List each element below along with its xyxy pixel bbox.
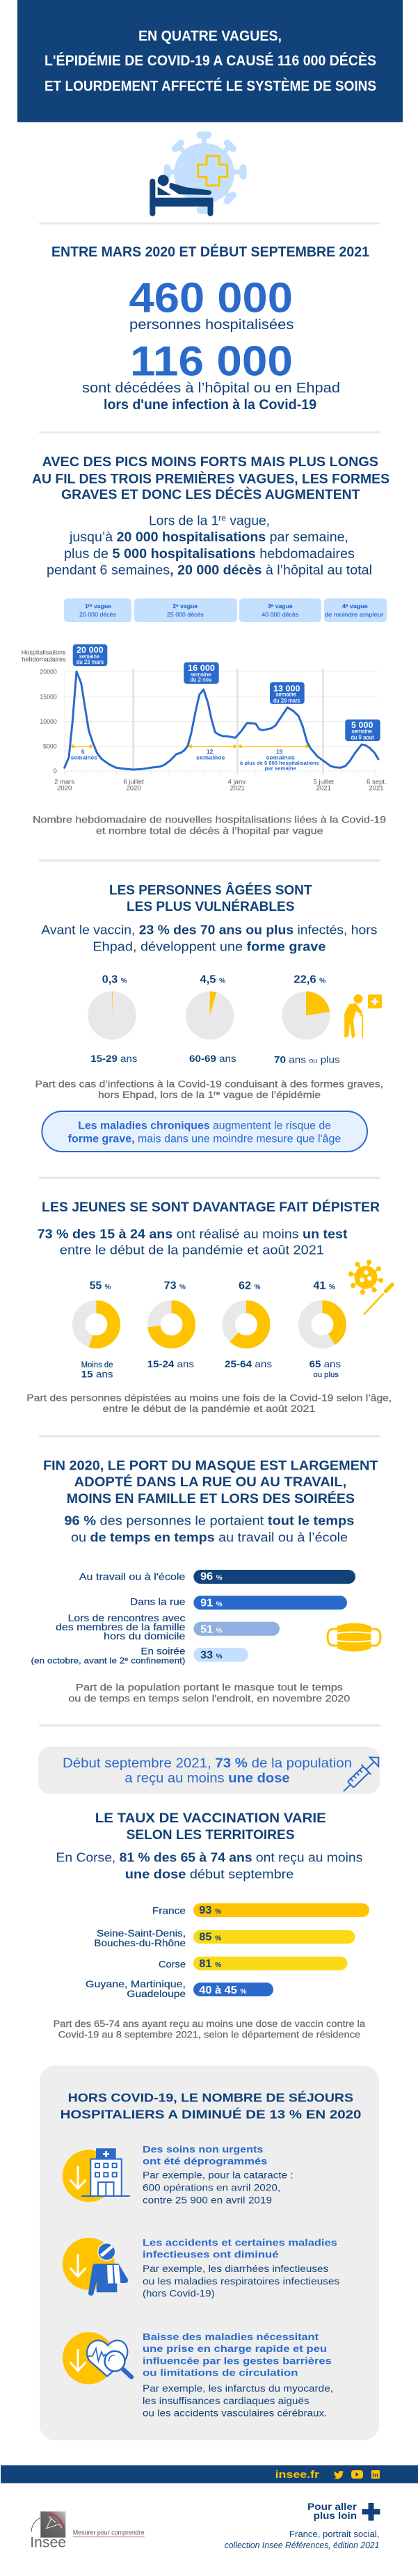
callout: 5 000: semaine <box>352 728 372 735</box>
icon: heart with magnifier and down arrow <box>63 2332 131 2384</box>
legend: wave boxes: re <box>88 604 93 608</box>
panel: older people <box>35 883 383 1152</box>
chart: weekly hospitalisations line: 15000 <box>40 693 57 701</box>
text: older people summary: Avant le vaccin, 23 % des 70 ans ou plus infectés, hors <box>41 922 377 937</box>
callout: 16 000: semaine <box>191 671 211 678</box>
text: accidents and infectious diseases: (hors Covid-19) <box>143 2289 215 2299</box>
chart: vaccination bars: 81 % <box>199 1958 221 1970</box>
labels: weeks above 5000: semaines <box>196 754 225 761</box>
chart: pie 15-29 ans: 0,3 % <box>102 973 127 985</box>
divider <box>39 431 380 434</box>
callout: 13 000: du 29 mars <box>273 697 300 703</box>
chart: vaccination bars: Seine-Saint-Denis, <box>97 1927 186 1939</box>
icon: linkedin <box>371 2470 380 2479</box>
text: deferred care: Par exemple, pour la cataracte : <box>143 2170 294 2180</box>
callout: 20 000: 20 000 <box>77 645 104 655</box>
text: masks summary: ou de temps en temps au travail ou à l’école <box>71 1529 348 1544</box>
chart: mask bars: 96 % <box>200 1571 223 1583</box>
text: accidents and infectious diseases: Les accidents et certaines maladies <box>143 2237 337 2248</box>
number: hospitalised: 460 000 <box>129 275 293 321</box>
text: accidents and infectious diseases: Par exemple, les diarrhées infectieuses <box>143 2264 328 2274</box>
title <box>45 28 376 94</box>
chart: donut 15-24 ans <box>147 1280 194 1369</box>
chart: pie 60-69 ans: 4,5 % <box>200 973 225 985</box>
text: urgent illnesses: influencée par les gestes barrières <box>143 2355 332 2366</box>
callout: 5 000 <box>345 719 380 741</box>
chart: pie 60-69 ans: 60-69 ans <box>189 1053 236 1064</box>
heading: pour aller plus loin <box>307 2501 357 2521</box>
text: vaccination <box>63 1756 352 1786</box>
labels: weeks above 5000: 6 <box>81 748 85 755</box>
chart: donut 15-24 ans: 73 % <box>164 1280 186 1292</box>
legend: wave boxes <box>64 598 387 622</box>
chart: vaccination bars: Guyane, Martinique, <box>86 1978 186 1989</box>
text: first wave summary: re <box>218 513 226 523</box>
text: urgent illnesses: Baisse des maladies nécessitant <box>143 2332 319 2342</box>
text: hospitalised label: personnes hospitalisées <box>129 317 294 333</box>
icon: twitter <box>334 2471 344 2479</box>
chart: donut 65 ans ou plus <box>305 1280 341 1379</box>
text: first wave summary: pendant 6 semaines , 20 000 décès à l’hôpital au total <box>47 564 372 578</box>
yellow ranges above 5000 <box>71 745 309 748</box>
caption: testing <box>26 1392 392 1414</box>
heading: waves: GRAVES ET DONC LES DÉCÈS AUGMENTENT <box>61 487 360 502</box>
labels: weeks above 5000: à plus de 5 000 hospitalisations <box>240 760 319 766</box>
legend: wave boxes: 4 <box>342 603 346 610</box>
text: accidents and infectious diseases: ou les maladies respiratoires infectieuses <box>143 2276 340 2287</box>
callout: 5 000: 5 000 <box>351 720 373 730</box>
icon: hospital with down arrow <box>63 2148 130 2202</box>
chart: mask bars: En soirée <box>140 1645 186 1656</box>
chart: mask bars <box>31 1570 355 1665</box>
text: accidents and infectious diseases: infectieuses ont diminué <box>143 2249 279 2259</box>
chart: donut 15-24 ans: 15-24 ans <box>147 1358 194 1369</box>
text: reference <box>225 2529 379 2550</box>
legend: wave boxes: 2 <box>172 603 176 610</box>
text: accidents and infectious diseases <box>143 2237 340 2299</box>
icon: elderly person with cross <box>344 994 382 1038</box>
callout: 16 000: du 2 nov. <box>191 676 213 683</box>
heading: hospital stays <box>61 2090 362 2122</box>
panel: header banner <box>17 0 403 122</box>
caption: waves chart: Nombre hebdomadaire de nouvelles hospitalisations liées à la Covid-19 <box>33 814 386 825</box>
text: territories summary: une dose début septembre <box>125 1866 294 1881</box>
chart: weekly hospitalisations line: hebdomadaires <box>22 655 66 663</box>
title: EN QUATRE VAGUES, <box>138 28 282 45</box>
caption: testing: entre le début de la pandémie et août 2021 <box>103 1404 315 1414</box>
text: first wave summary: vague, <box>226 514 270 528</box>
panel: non-Covid hospital stays <box>40 2065 379 2440</box>
chart: weekly hospitalisations line: 6 juillet <box>123 779 144 786</box>
chart: vaccination bars: Guadeloupe <box>127 1988 186 1999</box>
icon: youtube <box>351 2470 363 2479</box>
callout: 20 000: du 23 mars <box>77 658 104 665</box>
heading: waves <box>32 455 389 502</box>
caption: older people: Part des cas d’infections à la Covid-19 conduisant à des formes graves, <box>35 1079 383 1089</box>
chart: weekly hospitalisations line: 2020 <box>126 785 141 793</box>
chart: weekly hospitalisations line: 4 janv. <box>228 779 247 786</box>
heading: pour aller plus loin: Pour aller <box>307 2501 357 2512</box>
chart: weekly hospitalisations line: Hospitalisations <box>22 649 66 657</box>
text: testing summary: 73 % des 15 à 24 ans ont réalisé au moins un test <box>38 1226 347 1241</box>
labels: weeks above 5000: semaines <box>266 754 295 761</box>
text: masks summary: 96 % des personnes le portaient tout le temps <box>64 1513 354 1527</box>
heading: waves: AU FIL DES TROIS PREMIÈRES VAGUES, LES FORMES <box>32 471 389 486</box>
chart: weekly hospitalisations line: 2 mars <box>54 779 74 786</box>
text: testing summary: entre le début de la pandémie et août 2021 <box>60 1242 324 1257</box>
panel: vaccination callout <box>38 1747 383 1796</box>
chart: donut moins de 15 ans <box>79 1280 114 1379</box>
text: deferred care: Des soins non urgents <box>143 2145 263 2154</box>
text: testing summary <box>38 1226 347 1257</box>
caption: masks <box>68 1682 350 1703</box>
legend: wave boxes: e <box>271 604 274 608</box>
heading: masks: FIN 2020, LE PORT DU MASQUE EST LARGEMENT <box>43 1458 378 1473</box>
logo: Insee: Insee <box>30 2534 66 2551</box>
chart: donut 25-64 ans <box>225 1280 272 1369</box>
callout: 13 000: 13 000 <box>273 683 300 693</box>
text: deferred care: 600 opérations en avril 2020, <box>143 2182 280 2193</box>
legend: wave boxes: de moindre ampleur <box>325 611 383 618</box>
chart: donut 65 ans ou plus: 65 ans <box>310 1358 341 1369</box>
legend: wave boxes: vague <box>93 603 111 610</box>
text: urgent illnesses <box>143 2332 333 2419</box>
labels: weeks above 5000: semaines <box>71 754 97 761</box>
chart: weekly hospitalisations line: 0 <box>54 768 57 775</box>
heading: masks <box>43 1458 378 1506</box>
chart: mask bars: confinement) <box>128 1655 185 1665</box>
callout: chronic diseases <box>42 1111 367 1152</box>
heading: testing: LES JEUNES SE SONT DAVANTAGE FAIT DÉPISTER <box>42 1200 380 1215</box>
labels: weeks above 5000: 12 <box>207 748 214 755</box>
text: territories summary: En Corse, 81 % des 65 à 74 ans ont reçu au moins <box>56 1850 362 1864</box>
chart: mask bars: 91 % <box>200 1597 223 1609</box>
panel: waves <box>22 455 389 836</box>
divider <box>39 1435 380 1438</box>
panel: mask wearing <box>31 1458 380 1703</box>
caption: territories: Part des 65-74 ans ayant reçu au moins une dose de vaccin contre la <box>54 2019 366 2029</box>
icon: linkedin: in <box>373 2472 378 2479</box>
text: first wave summary: plus de 5 000 hospitalisations hebdomadaires <box>64 547 355 562</box>
line: hospitalisations <box>65 671 378 770</box>
caption: older people: re <box>214 1090 220 1097</box>
text: deaths label: sont décédées à l’hôpital ou en Ehpad <box>82 381 340 396</box>
text: urgent illnesses: une prise en charge rapide et peu <box>143 2344 327 2354</box>
text: vaccination: Début septembre 2021, 73 % de la population <box>63 1756 352 1771</box>
panel: further reading <box>225 2501 380 2550</box>
legend: wave boxes: 20 000 décès <box>79 611 116 618</box>
chart: weekly hospitalisations line: 2021 <box>316 785 331 793</box>
text: first wave summary: jusqu’à 20 000 hospitalisations par semaine, <box>69 530 348 545</box>
caption: waves chart <box>33 814 386 836</box>
caption: older people: vague de l’épidémie <box>220 1090 321 1100</box>
chart: donut 65 ans ou plus: ou plus <box>313 1371 339 1379</box>
chart: mask bars: e <box>124 1656 129 1662</box>
caption: masks: ou de temps en temps selon l'endroit, en novembre 2020 <box>68 1693 350 1703</box>
chart: pie 70 ans ou plus: 70 ans ou plus <box>274 1054 340 1065</box>
caption: territories: Covid-19 au 8 septembre 2021, selon le département de résidence <box>58 2029 360 2040</box>
chart: vaccination bars <box>86 1903 369 1999</box>
chart: pie 15-29 ans: 15-29 ans <box>90 1053 137 1064</box>
title: ET LOURDEMENT AFFECTÉ LE SYSTÈME DE SOINS <box>45 77 376 94</box>
text: older people summary: Ehpad, développent une forme grave <box>93 939 325 954</box>
chart: vaccination bars: 93 % <box>199 1905 221 1916</box>
panel: vaccination by territory <box>54 1811 369 2040</box>
heading: hospital stays: HOSPITALIERS A DIMINUÉ DE 13 % EN 2020 <box>61 2107 362 2122</box>
chart: vaccination bars: 85 % <box>199 1932 221 1943</box>
text: deferred care: contre 25 900 en avril 2019 <box>143 2195 272 2205</box>
heading: masks: MOINS EN FAMILLE ET LORS DES SOIRÉES <box>67 1491 355 1506</box>
chart: mask bars: (en octobre, avant le 2 <box>31 1655 114 1665</box>
heading: older people: LES PERSONNES ÂGÉES SONT <box>109 883 312 898</box>
chart: weekly hospitalisations line: 10000 <box>40 718 57 726</box>
labels: weeks above 5000 <box>71 748 319 772</box>
text: deferred care <box>143 2145 294 2205</box>
chart: donut moins de 15 ans: 55 % <box>90 1280 111 1292</box>
footer bar <box>1 2465 418 2483</box>
chart: weekly hospitalisations line: 6 sept. <box>367 779 387 786</box>
legend: wave boxes: vague <box>179 603 198 610</box>
heading: masks: ADOPTÉ DANS LA RUE OU AU TRAVAIL, <box>74 1474 346 1490</box>
chart: weekly hospitalisations line: 5 juillet <box>314 779 334 786</box>
chart: vaccination bars: France <box>152 1905 186 1916</box>
chart: mask bars: des membres de la famille <box>56 1621 186 1632</box>
text: deferred care: ont été déprogrammés <box>143 2156 267 2167</box>
chart: weekly hospitalisations line: 2020 <box>57 785 72 793</box>
text: territories summary <box>56 1850 362 1881</box>
logo: Insee <box>30 2511 145 2551</box>
text: urgent illnesses: ou les accidents vasculaires cérébraux. <box>143 2408 327 2419</box>
caption: testing: Part des personnes dépistées au moins une fois de la Covid-19 selon l’âge, <box>26 1392 392 1403</box>
callout: 20 000 <box>73 644 107 666</box>
heading: territories <box>95 1811 326 1843</box>
chart: vaccination bars: 40 à 45 % <box>199 1985 247 1996</box>
legend: wave boxes: vague <box>348 603 368 610</box>
callout: 20 000: semaine <box>79 653 99 660</box>
chart: weekly hospitalisations line: 20000 <box>40 668 57 676</box>
text: urgent illnesses: Par exemple, les infarctus du myocarde, <box>143 2383 333 2394</box>
labels: weeks above 5000: 19 <box>276 748 283 755</box>
legend: wave boxes: e <box>346 604 348 608</box>
divider <box>39 859 380 861</box>
divider <box>39 1177 380 1179</box>
chart: pie 60-69 ans <box>186 973 236 1064</box>
chart: donut 25-64 ans: 62 % <box>239 1280 261 1292</box>
icon: yellow virus and swab <box>348 1259 392 1314</box>
chart: mask bars: Dans la rue <box>130 1596 186 1607</box>
legend: wave boxes: vague <box>273 603 293 610</box>
heading: pour aller plus loin: plus loin <box>314 2510 357 2521</box>
legend: wave boxes: 40 000 décès <box>262 611 298 618</box>
text: first wave summary <box>47 513 372 578</box>
divider <box>39 1724 380 1727</box>
icon: injured person with down arrow <box>63 2238 128 2296</box>
legend: wave boxes: e <box>176 604 179 608</box>
icon: plus <box>362 2503 380 2520</box>
chart: weekly hospitalisations line <box>22 644 387 793</box>
chart: weekly hospitalisations line: 2021 <box>369 785 384 793</box>
title: L'ÉPIDÉMIE DE COVID-19 A CAUSÉ 116 000 DÉCÈS <box>45 51 376 69</box>
chart: mask bars: 51 % <box>200 1623 223 1635</box>
chart: weekly hospitalisations line: 2021 <box>230 785 245 793</box>
heading: older people <box>109 883 312 914</box>
chart: pie 70 ans ou plus <box>274 973 340 1065</box>
callout: chronic diseases: Les maladies chroniques augmentent le risque de <box>78 1120 331 1131</box>
text: urgent illnesses: ou limitations de circulation <box>143 2367 298 2378</box>
heading: hospital stays: HORS COVID-19, LE NOMBRE DE SÉJOURS <box>68 2090 353 2105</box>
number: deaths: 116 000 <box>130 338 293 384</box>
divider <box>39 223 380 224</box>
legend: wave boxes: 3 <box>268 603 271 610</box>
panel: key figures <box>51 244 369 413</box>
text: deaths label <box>82 381 340 413</box>
chart: pie 15-29 ans <box>88 973 137 1064</box>
text: vaccination: a reçu au moins une dose <box>124 1771 290 1786</box>
chart: mask bars: hors du domicile <box>104 1630 186 1641</box>
callout: chronic diseases: forme grave, mais dans une moindre mesure que l'âge <box>68 1133 341 1145</box>
chart: pie 70 ans ou plus: 22,6 % <box>294 973 325 985</box>
caption: older people <box>35 1079 383 1100</box>
caption: masks: Part de la population portant le masque tout le temps <box>76 1682 343 1692</box>
text: urgent illnesses: les insuffisances cardiaques aiguës <box>143 2396 310 2406</box>
text: older people summary <box>41 922 377 954</box>
legend: wave boxes: 1 <box>85 603 88 610</box>
icon: mask <box>328 1623 380 1652</box>
icon: syringe <box>339 1752 383 1796</box>
callout: 16 000: 16 000 <box>188 663 215 673</box>
icon: virus with hospital bed <box>150 135 243 216</box>
logo: Insee: Mesurer pour comprendre <box>73 2529 145 2537</box>
chart: donut 25-64 ans: 25-64 ans <box>225 1358 272 1369</box>
text: masks summary <box>64 1513 354 1544</box>
labels: weeks above 5000: par semaine <box>265 765 296 772</box>
chart: vaccination bars: Bouches-du-Rhône <box>94 1937 186 1948</box>
chart: weekly hospitalisations line: 5000 <box>43 743 57 751</box>
chart: vaccination bars: Corse <box>159 1958 186 1969</box>
caption: older people: hors Ehpad, lors de la 1 <box>98 1090 198 1100</box>
chart: donut moins de 15 ans: Moins de <box>81 1361 113 1369</box>
heading: territories: LE TAUX DE VACCINATION VARIE <box>95 1811 326 1826</box>
heading: period: ENTRE MARS 2020 ET DÉBUT SEPTEMBRE 2021 <box>51 244 369 260</box>
caption: waves chart: et nombre total de décès à l’hopital par vague <box>96 825 323 836</box>
chart: mask bars: 33 % <box>200 1649 223 1661</box>
heading: older people: LES PLUS VULNÉRABLES <box>127 899 295 914</box>
caption: territories <box>54 2019 366 2040</box>
text: first wave summary: Lors de la 1 <box>149 514 218 528</box>
chart: mask bars: Au travail ou à l'école <box>79 1571 186 1582</box>
callout: 5 000: du 9 aout <box>351 733 374 740</box>
chart: mask bars: Lors de rencontres avec <box>68 1612 185 1623</box>
heading: waves: AVEC DES PICS MOINS FORTS MAIS PLUS LONGS <box>42 455 378 470</box>
callout: 13 000: semaine <box>275 690 296 697</box>
link: insee.fr: insee.fr <box>275 2470 319 2481</box>
text: reference: France, portrait social, <box>289 2529 379 2539</box>
legend: wave boxes: 25 000 décès <box>167 611 204 618</box>
chart: donut 65 ans ou plus: 41 % <box>313 1280 335 1292</box>
callout: 16 000 <box>184 662 219 684</box>
callout: 13 000 <box>270 682 305 704</box>
panel: testing among young people <box>26 1200 392 1414</box>
text: reference: collection Insee Références, édition 2021 <box>225 2540 379 2550</box>
heading: territories: SELON LES TERRITOIRES <box>127 1828 295 1843</box>
text: deaths label: lors d'une infection à la Covid-19 <box>104 397 316 413</box>
chart: donut moins de 15 ans: 15 ans <box>81 1368 113 1379</box>
